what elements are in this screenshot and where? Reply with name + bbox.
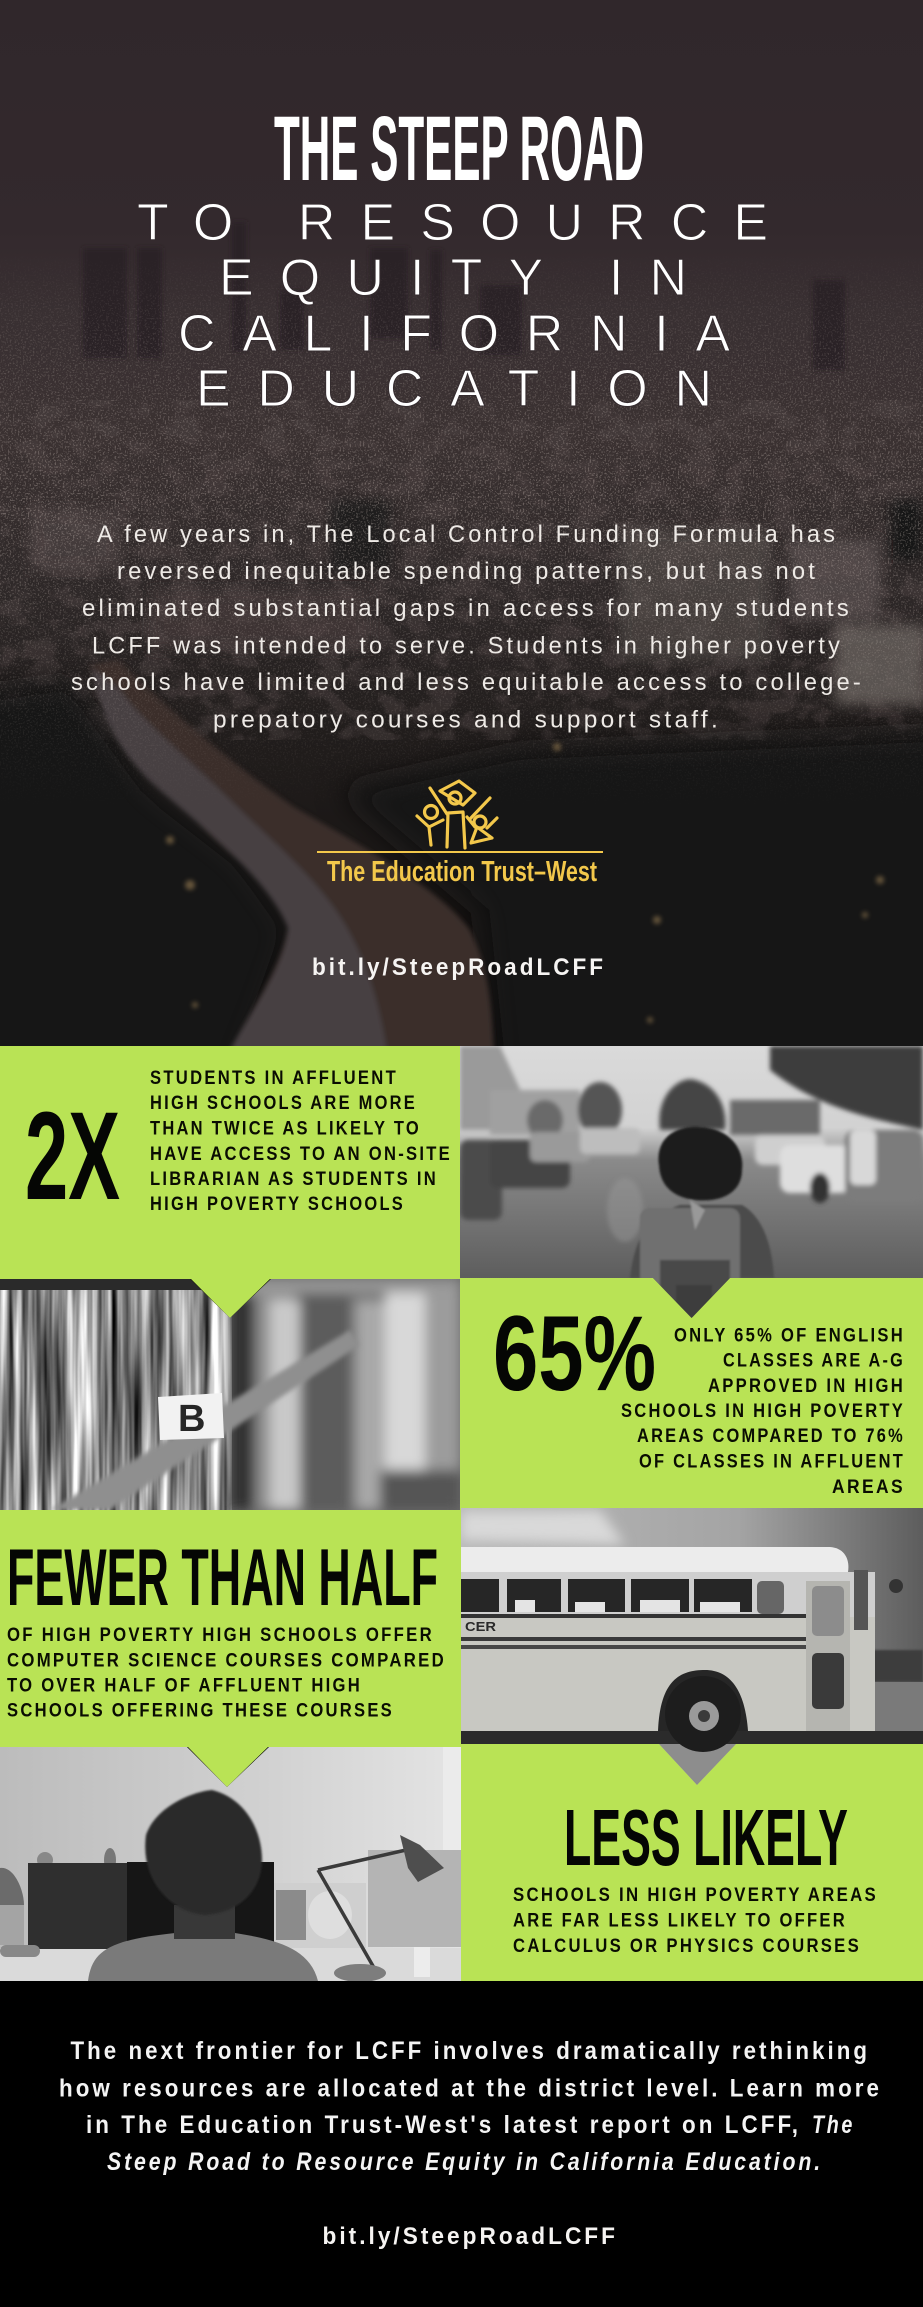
closing paragraph xyxy=(59,2037,882,2176)
stat text: AREAS xyxy=(832,1477,905,1498)
link: bit.ly: bit.ly/SteepRoadLCFF xyxy=(312,954,606,981)
stat text: HIGH SCHOOLS ARE MORE xyxy=(150,1093,417,1114)
logo wordmark: The Education Trust–West xyxy=(327,856,597,888)
title xyxy=(137,98,768,418)
stat text: OF HIGH POVERTY HIGH SCHOOLS OFFER xyxy=(7,1625,434,1646)
desk items xyxy=(0,1848,461,1981)
intro paragraph xyxy=(71,521,864,734)
parked cars xyxy=(460,1140,502,1220)
logo rule xyxy=(317,851,603,853)
stat text: CALCULUS OR PHYSICS COURSES xyxy=(513,1936,861,1957)
subtitle: EQUITY IN xyxy=(219,249,687,307)
road xyxy=(90,660,494,1060)
subtitle xyxy=(137,194,768,418)
shelf label: B xyxy=(178,1398,205,1440)
bus body xyxy=(461,1547,903,1731)
stat text: SCHOOLS OFFERING THESE COURSES xyxy=(7,1700,394,1722)
intro paragraph: reversed inequitable spending patterns, but has not xyxy=(117,558,818,585)
link: bit.ly footer: bit.ly/SteepRoadLCFF xyxy=(322,2223,618,2250)
stat text: THAN TWICE AS LIKELY TO xyxy=(150,1118,421,1140)
stat text xyxy=(150,1068,452,1215)
person xyxy=(88,1790,318,1981)
stat text: TO OVER HALF OF AFFLUENT HIGH xyxy=(7,1676,362,1696)
stat text: ARE FAR LESS LIKELY TO OFFER xyxy=(513,1910,847,1932)
photo: student with backpack walking down street xyxy=(460,1046,923,1318)
stat heading: FEWER THAN HALF xyxy=(7,1533,438,1623)
intro paragraph: prepatory courses and support staff. xyxy=(213,706,721,734)
stat text: HIGH POVERTY SCHOOLS xyxy=(150,1194,405,1215)
wheel xyxy=(665,1676,741,1752)
trees xyxy=(0,669,923,1046)
intro paragraph: eliminated substantial gaps in access for many students xyxy=(82,595,852,622)
city lights xyxy=(0,283,923,768)
photo: library shelf with B marker xyxy=(0,1279,460,1510)
desk lamp xyxy=(318,1835,444,1982)
stat text xyxy=(513,1885,878,1957)
subtitle: TO RESOURCE xyxy=(137,194,768,252)
stat text xyxy=(621,1326,905,1498)
photo: student at computer desk xyxy=(0,1747,461,1982)
stat text: STUDENTS IN AFFLUENT xyxy=(150,1068,398,1089)
stat 2: 65% xyxy=(493,1293,905,1498)
big number: 2X xyxy=(25,1087,120,1226)
subtitle: CALIFORNIA xyxy=(178,305,730,363)
photo: school bus xyxy=(461,1508,923,1785)
icon: raised-hands students with graduation cap xyxy=(417,781,497,848)
stat text: LIBRARIAN AS STUDENTS IN xyxy=(150,1169,438,1190)
panel: green backgrounds xyxy=(0,1046,923,1981)
intro paragraph: LCFF was intended to serve. Students in higher poverty xyxy=(92,632,843,660)
shelf label xyxy=(158,1393,224,1440)
stat 1: 2X xyxy=(25,1068,452,1226)
stat 4: less likely xyxy=(513,1793,878,1957)
closing paragraph: in The Education Trust-West's latest report on LCFF, xyxy=(86,2111,801,2139)
stat text: HAVE ACCESS TO AN ON-SITE xyxy=(150,1144,452,1165)
intro paragraph: A few years in, The Local Control Funding Formula has xyxy=(97,521,838,548)
bus lettering: CER xyxy=(465,1619,497,1634)
stat text: COMPUTER SCIENCE COURSES COMPARED xyxy=(7,1650,446,1672)
logo: The Education Trust-West xyxy=(317,781,603,888)
stat text: SCHOOLS IN HIGH POVERTY AREAS xyxy=(513,1885,878,1906)
subtitle: EDUCATION xyxy=(196,360,712,418)
closing paragraph: The xyxy=(812,2111,855,2139)
intro paragraph: schools have limited and less equitable access to college- xyxy=(71,669,864,696)
girl xyxy=(630,1127,774,1318)
stat text xyxy=(7,1625,446,1722)
stat 3: fewer than half xyxy=(7,1533,446,1722)
hero photo: night city and road xyxy=(0,0,923,1100)
big number: 65% xyxy=(493,1293,656,1413)
